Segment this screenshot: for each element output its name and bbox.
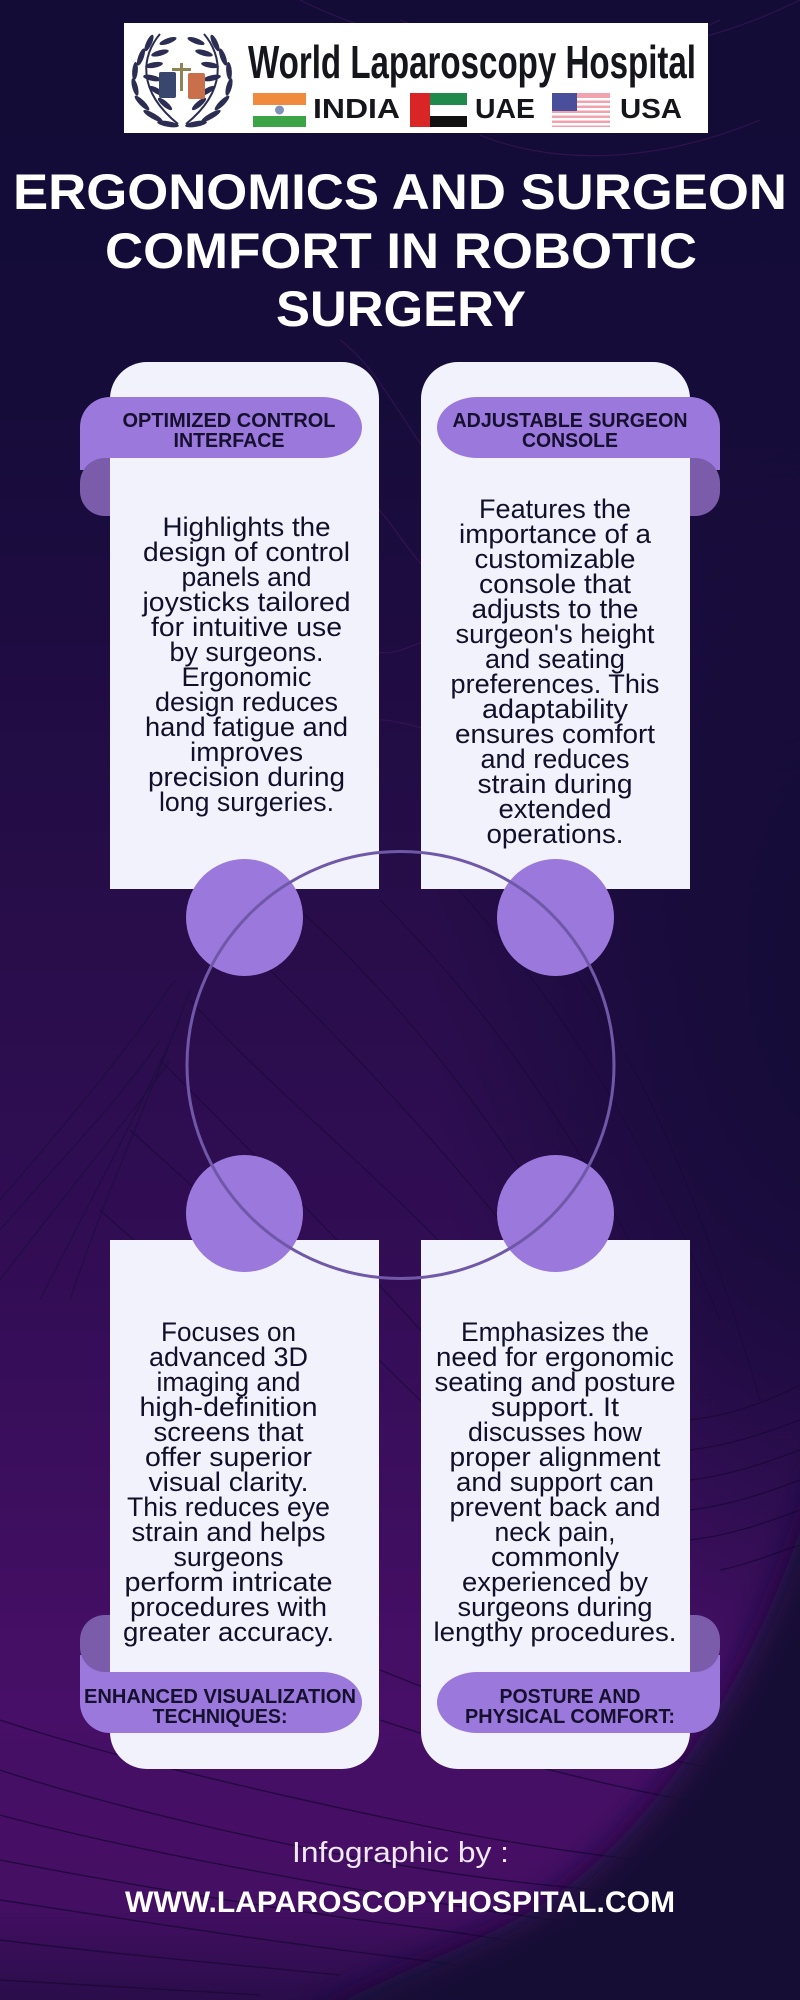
- text block: Highlights the: [162, 512, 330, 542]
- flag: UAE: [410, 93, 467, 127]
- text block: importance of a: [459, 519, 652, 549]
- text block: discusses how: [468, 1417, 642, 1447]
- text block: hand fatigue and: [145, 712, 348, 742]
- text block: [434, 1317, 676, 1647]
- title: SURGERY: [276, 281, 526, 337]
- circle: top right: [497, 859, 614, 976]
- text block: improves: [190, 737, 303, 767]
- text block: design of control: [143, 537, 350, 567]
- text block: commonly: [491, 1542, 620, 1572]
- text block: surgeon's height: [456, 619, 655, 649]
- text block: console that: [479, 569, 632, 599]
- text block: [450, 494, 660, 849]
- heading: ADJUSTABLE SURGEON: [452, 410, 688, 432]
- title: ERGONOMICS AND SURGEON: [13, 164, 787, 220]
- text block: and reduces: [480, 744, 630, 774]
- text block: proper alignment: [450, 1442, 661, 1472]
- text block: lengthy procedures.: [434, 1617, 676, 1647]
- heading: INTERFACE: [174, 430, 284, 452]
- heading: [84, 1686, 356, 1728]
- text block: visual clarity.: [148, 1467, 308, 1497]
- text block: imaging and: [156, 1367, 300, 1397]
- text block: support. It: [491, 1392, 620, 1422]
- heading: ENHANCED VISUALIZATION: [84, 1686, 356, 1708]
- text block: seating and posture: [434, 1367, 676, 1397]
- UAE label: UAE: [475, 93, 535, 124]
- flag: USA: [552, 93, 610, 127]
- text block: joysticks tailored: [141, 587, 350, 617]
- text block: need for ergonomic: [436, 1342, 674, 1372]
- footer credit: WWW.LAPAROSCOPYHOSPITAL.COM: [125, 1886, 675, 1919]
- text block: ensures comfort: [455, 719, 656, 749]
- title: COMFORT IN ROBOTIC: [105, 223, 697, 279]
- panel: posture and physical comfort: [421, 1240, 720, 1769]
- footer credit: [125, 1837, 675, 1919]
- text block: adaptability: [482, 694, 629, 724]
- text block: customizable: [474, 544, 636, 574]
- dark corner shape bottom right: [290, 1430, 800, 2000]
- logo banner: [124, 23, 708, 133]
- central ring: [187, 852, 614, 1278]
- text block: operations.: [486, 819, 624, 849]
- heading: POSTURE AND: [500, 1686, 640, 1708]
- icon: laurel wreath: [130, 34, 234, 129]
- text block: Features the: [479, 494, 631, 524]
- text block: for intuitive use: [151, 612, 342, 642]
- text block: [141, 512, 350, 817]
- text block: advanced 3D: [149, 1342, 308, 1372]
- panel: enhanced visualization techniques: [80, 1240, 379, 1769]
- text block: [123, 1317, 334, 1647]
- text block: high-definition: [140, 1392, 318, 1422]
- text block: perform intricate: [124, 1567, 332, 1597]
- flag: India: [253, 93, 306, 127]
- text block: Emphasizes the: [461, 1317, 649, 1347]
- text block: long surgeries.: [159, 787, 334, 817]
- title: [13, 164, 787, 337]
- text block: experienced by: [462, 1567, 649, 1597]
- text block: screens that: [154, 1417, 304, 1447]
- footer credit: Infographic by :: [292, 1837, 509, 1869]
- heading: CONSOLE: [522, 430, 618, 452]
- text block: greater accuracy.: [123, 1617, 334, 1647]
- text block: and seating: [485, 644, 625, 674]
- text block: neck pain,: [494, 1517, 616, 1547]
- India label: INDIA: [313, 93, 400, 124]
- heading: OPTIMIZED CONTROL: [122, 410, 336, 432]
- text block: offer superior: [145, 1442, 312, 1472]
- heading: [465, 1686, 675, 1728]
- text block: preferences. This: [450, 669, 660, 699]
- text block: strain during: [478, 769, 632, 799]
- panel: adjustable surgeon console: [421, 362, 720, 889]
- text block: design reduces: [155, 687, 338, 717]
- text block: precision during: [148, 762, 345, 792]
- text block: prevent back and: [450, 1492, 660, 1522]
- heading: PHYSICAL COMFORT:: [465, 1706, 675, 1728]
- circle: bottom left: [186, 1155, 303, 1272]
- circle: top left: [186, 859, 303, 976]
- text block: Focuses on: [161, 1317, 296, 1347]
- text block: and support can: [456, 1467, 654, 1497]
- heading: TECHNIQUES:: [152, 1706, 288, 1728]
- text block: surgeons: [174, 1542, 284, 1572]
- text block: by surgeons.: [170, 637, 324, 667]
- text block: extended: [498, 794, 612, 824]
- text block: Ergonomic: [182, 662, 312, 692]
- heading: [122, 410, 336, 452]
- heading: [452, 410, 688, 452]
- text block: procedures with: [130, 1592, 327, 1622]
- text block: surgeons during: [458, 1592, 652, 1622]
- panel: optimized control interface: [80, 362, 379, 889]
- text block: adjusts to the: [472, 594, 638, 624]
- circle: bottom right: [497, 1155, 614, 1272]
- USA label: USA: [620, 93, 682, 124]
- text block: This reduces eye: [127, 1492, 330, 1522]
- text block: panels and: [182, 562, 312, 592]
- text block: strain and helps: [132, 1517, 326, 1547]
